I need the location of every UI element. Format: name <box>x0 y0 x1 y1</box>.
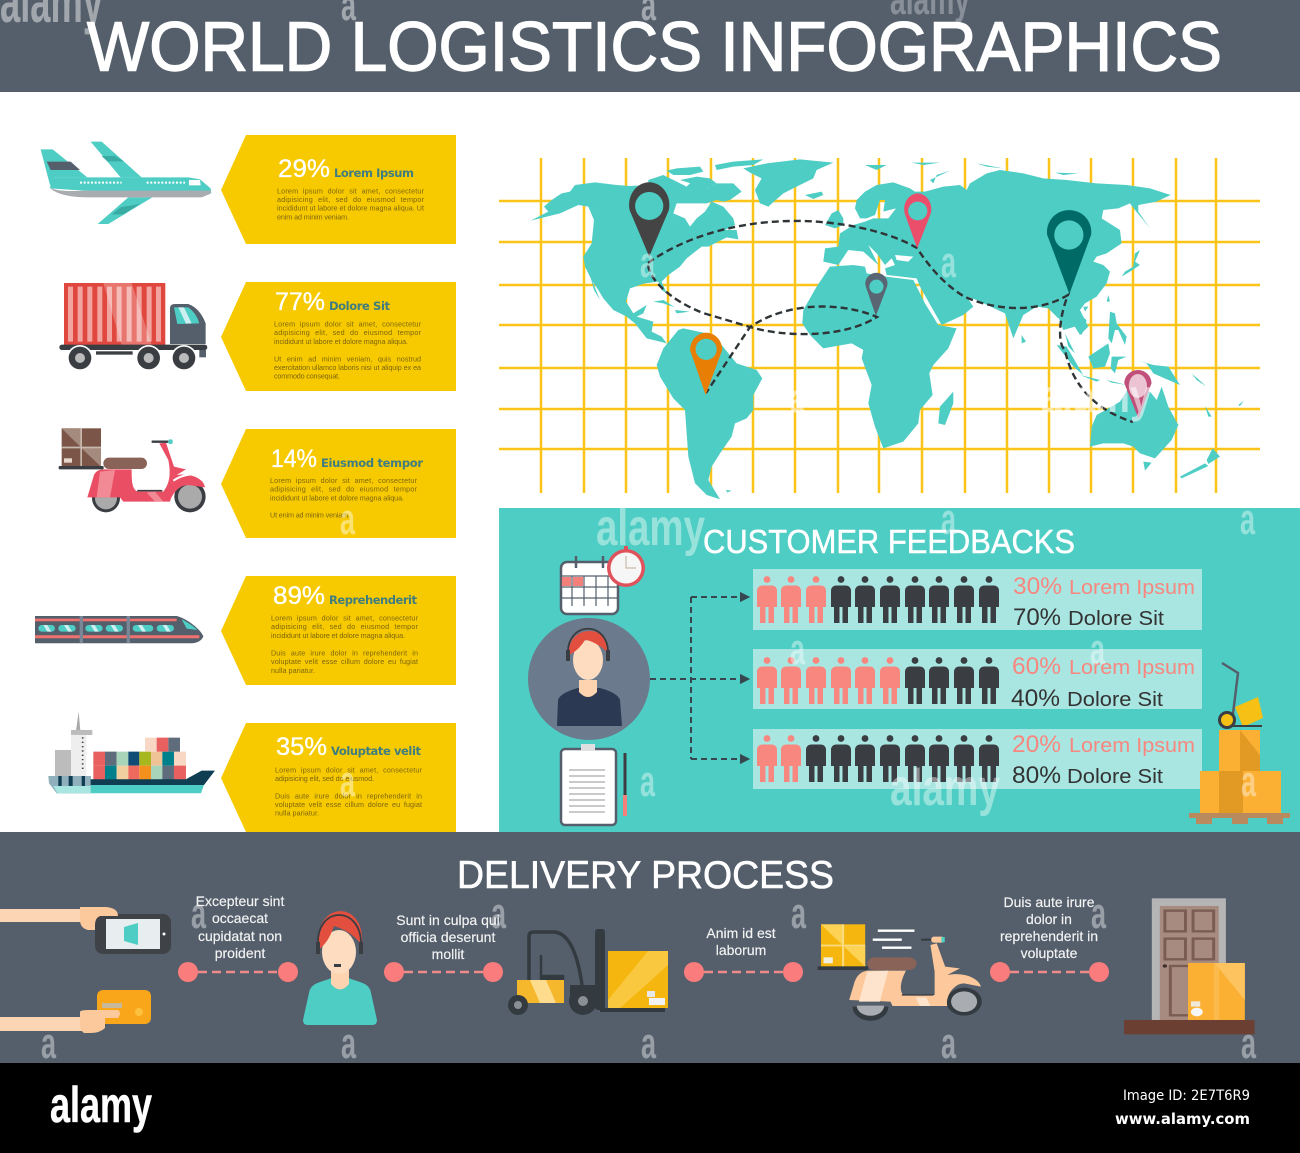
panel: eiusmod tempor 14 percent: incididunt ut labore et dolore magna aliqua. <box>270 494 404 502</box>
icon: container ship <box>48 712 215 793</box>
footer: stock image bar: www.alamy.com <box>1115 1110 1250 1128</box>
panel: dolore sit 77 percent: Dolore Sit <box>329 299 390 313</box>
footer: stock image bar: alamy <box>50 1077 152 1133</box>
panel: customer feedbacks: a <box>1090 625 1105 674</box>
panel: delivery process <box>0 832 1300 1068</box>
text: duis aute irure: reprehenderit in <box>1000 928 1098 944</box>
panel: reprehenderit 89 percent: Reprehenderit <box>329 593 418 607</box>
panel: voluptate velit 35 percent: Lorem ipsum dolor sit amet, consectetur <box>275 766 423 774</box>
result row: 30 percent: Dolore Sit <box>1068 608 1164 630</box>
panel: delivery process: a <box>791 889 806 938</box>
footer: stock image bar: Image ID: 2E7T6R9 <box>1123 1088 1250 1104</box>
panel: reprehenderit 89 percent: nulla pariatur. <box>271 666 315 675</box>
connector: step one <box>178 962 298 982</box>
icon: high speed train <box>35 616 203 643</box>
panel: lorem ipsum 29 percent: adipisicing elit, sed do eiusmod tempor <box>277 195 425 204</box>
panel: customer feedbacks: a <box>941 495 956 544</box>
panel: dolore sit 77 percent: Lorem ipsum dolor sit amet, consectetur <box>274 320 422 328</box>
text: sunt in culpa: mollit <box>432 946 464 962</box>
panel: delivery process: a <box>641 1019 656 1068</box>
result row: 30 percent: 30% <box>1013 573 1062 600</box>
result row: 30 percent: Lorem Ipsum <box>1069 577 1195 599</box>
footer: stock image bar <box>0 1063 1300 1153</box>
text: anim id est <box>706 925 776 958</box>
panel: eiusmod tempor 14 percent: Lorem ipsum dolor sit amet, consectetur <box>270 476 418 485</box>
panel: reprehenderit 89 percent: Lorem ipsum dolor sit amet, consectetur <box>271 614 419 622</box>
panel: delivery process: a <box>1241 1019 1256 1068</box>
panel: delivery process: a <box>1091 889 1106 938</box>
panel: voluptate velit 35 percent: Duis aute irure dolor in reprehenderit in <box>275 792 422 800</box>
result row: 60 percent: Dolore Sit <box>1067 689 1163 711</box>
panel: voluptate velit 35 percent: Voluptate velit <box>331 744 422 758</box>
icon: courier scooter <box>818 924 982 1021</box>
panel: lorem ipsum 29 percent <box>221 135 456 244</box>
panel: dolore sit 77 percent: exercitation ullamco laboris nisi ut aliquip ex ea <box>274 363 421 372</box>
icon: delivery agent <box>303 911 377 1025</box>
result row: 20 percent: 20% <box>1012 731 1061 758</box>
icon: support agent <box>528 618 650 740</box>
heading: customer feedbacks: CUSTOMER FEEDBACKS <box>703 523 1075 560</box>
arrows: agent to results <box>650 594 748 762</box>
panel: eiusmod tempor 14 percent: adipisicing elit, sed do eiusmod tempor <box>270 484 418 494</box>
world map with grid, routes and pins <box>499 158 1260 499</box>
panel: delivery process: a <box>191 889 206 938</box>
panel: delivery process: a <box>41 1019 56 1068</box>
panel: reprehenderit 89 percent: incididunt ut labore et dolore magna aliqua. <box>271 631 405 640</box>
connector: step two <box>384 962 503 982</box>
panel: eiusmod tempor 14 percent <box>221 429 456 538</box>
text: duis aute irure <box>1000 894 1098 961</box>
result row: 20 percent: 80% <box>1012 762 1061 789</box>
panel: customer feedbacks <box>340 495 1300 832</box>
panel: customer feedbacks: a <box>340 757 355 806</box>
panel: dolore sit 77 percent: 77% <box>275 288 325 316</box>
text: sunt in culpa: Sunt in culpa qui <box>396 912 500 928</box>
result row: 20 percent: Lorem Ipsum <box>1069 735 1195 757</box>
icon: hand holding credit card <box>0 990 151 1033</box>
panel: eiusmod tempor 14 percent: 14% <box>271 445 317 473</box>
panel: reprehenderit 89 percent <box>221 576 456 685</box>
result row: 60 percent <box>753 649 1202 712</box>
panel: lorem ipsum 29 percent: enim ad minim veniam. <box>277 212 349 222</box>
panel: dolore sit 77 percent: incididunt ut labore et dolore magna aliqua. <box>274 337 408 346</box>
panel: customer feedbacks: a <box>340 495 355 544</box>
connector: step three <box>684 962 803 982</box>
panel: customer feedbacks: a <box>790 625 805 674</box>
panel: customer feedbacks: a <box>640 757 655 806</box>
icon: door with parcel <box>1124 898 1255 1034</box>
panel: voluptate velit 35 percent <box>221 723 456 832</box>
result row: 20 percent: Dolore Sit <box>1067 766 1163 788</box>
panel: customer feedbacks: alamy <box>890 759 1000 817</box>
panel: voluptate velit 35 percent: adipisicing elit, sed do eiusmod. <box>275 774 374 783</box>
icon: stacked boxes and hand truck <box>1189 663 1290 824</box>
panel: reprehenderit 89 percent: voluptate velit esse cillum dolore eu fugiat <box>271 657 418 666</box>
text: excepteur sint: proident <box>215 945 265 961</box>
text: sunt in culpa: officia deserunt <box>401 929 495 945</box>
text: duis aute irure: dolor in <box>1026 911 1072 927</box>
icon: airplane <box>41 142 211 224</box>
text: sunt in culpa <box>396 912 500 962</box>
icon: hand holding phone <box>0 907 171 954</box>
result row: 60 percent: Lorem Ipsum <box>1069 657 1195 679</box>
panel: lorem ipsum 29 percent: Lorem ipsum dolor sit amet, consectetur <box>277 186 425 196</box>
icon: container truck <box>59 283 207 371</box>
result row: 20 percent <box>753 729 1202 789</box>
world map with grid, routes and pins: alamy <box>1040 370 1152 422</box>
heading: delivery process: DELIVERY PROCESS <box>457 854 834 897</box>
text: duis aute irure: voluptate <box>1021 945 1078 961</box>
panel: reprehenderit 89 percent: Duis aute irure dolor in reprehenderit in <box>271 648 418 658</box>
panel: delivery process: a <box>941 1019 956 1068</box>
panel: dolore sit 77 percent: Ut enim ad minim veniam, quis nostrud <box>274 354 421 364</box>
icon: clipboard checklist <box>561 744 625 825</box>
panel: lorem ipsum 29 percent: 29% <box>278 155 330 183</box>
panel: customer feedbacks: alamy <box>596 499 705 557</box>
result row: 30 percent <box>753 569 1202 631</box>
text: anim id est: Anim id est <box>706 925 776 941</box>
title banner: WORLD LOGISTICS INFOGRAPHICS <box>87 8 1222 86</box>
result row: 60 percent: 60% <box>1012 653 1061 680</box>
connector: step four <box>990 962 1109 982</box>
world map with grid, routes and pins: a <box>640 238 655 287</box>
text: excepteur sint: occaecat <box>212 910 268 926</box>
panel: voluptate velit 35 percent: nulla pariatur. <box>275 808 319 818</box>
panel: reprehenderit 89 percent: adipisicing elit, sed do eiusmod tempor <box>271 622 419 631</box>
icon: red delivery scooter <box>59 428 206 512</box>
world map with grid, routes and pins: a <box>790 377 804 421</box>
panel: customer feedbacks: a <box>1241 757 1256 806</box>
panel: delivery process: a <box>341 1019 356 1068</box>
panel: customer feedbacks: a <box>1240 495 1255 544</box>
icon: forklift with box <box>508 929 668 1015</box>
text: excepteur sint: cupidatat non <box>198 928 282 944</box>
panel: eiusmod tempor 14 percent: Ut enim ad minim veniam. <box>270 510 350 520</box>
panel: delivery process: a <box>491 889 506 938</box>
panel: lorem ipsum 29 percent: Lorem Ipsum <box>334 166 414 180</box>
panel: dolore sit 77 percent: adipisicing elit, sed do eiusmod tempor <box>274 328 422 337</box>
panel: voluptate velit 35 percent: voluptate velit esse cillum dolore eu fugiat <box>275 800 422 809</box>
text: excepteur sint <box>196 893 284 961</box>
text: duis aute irure: Duis aute irure <box>1003 894 1095 910</box>
panel: lorem ipsum 29 percent: incididunt ut labore et dolore magna aliqua. Ut <box>277 204 424 212</box>
text: anim id est: laborum <box>716 942 766 958</box>
result row: 60 percent: 40% <box>1011 685 1060 712</box>
panel: voluptate velit 35 percent: 35% <box>276 733 327 761</box>
result row: 30 percent: 70% <box>1013 604 1061 631</box>
panel: reprehenderit 89 percent: 89% <box>273 582 325 610</box>
text: excepteur sint: Excepteur sint <box>196 893 284 909</box>
icon: calendar and stopwatch <box>561 546 645 614</box>
panel: dolore sit 77 percent <box>221 282 456 391</box>
panel: dolore sit 77 percent: commodo consequat. <box>274 372 340 380</box>
panel: eiusmod tempor 14 percent: Eiusmod tempor <box>321 456 423 470</box>
world map with grid, routes and pins: a <box>941 238 956 287</box>
